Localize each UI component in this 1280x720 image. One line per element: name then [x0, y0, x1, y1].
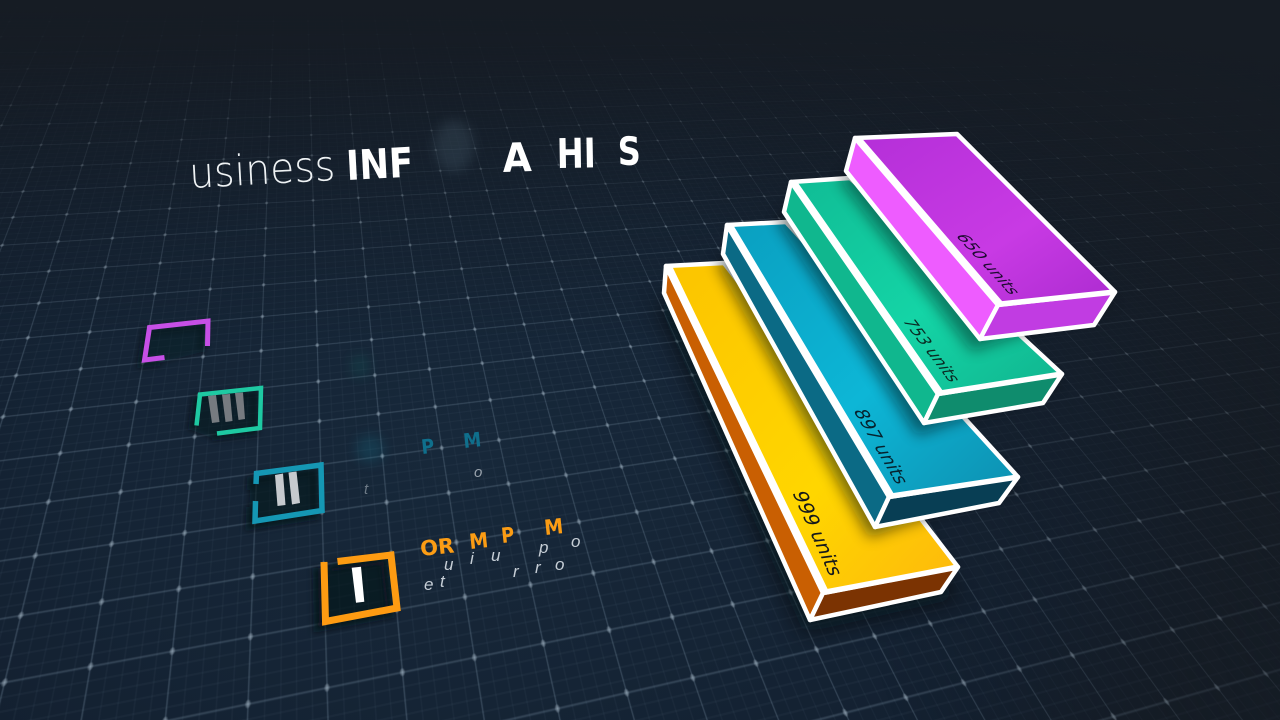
value label: 897 units: 897 units: [848, 408, 912, 485]
label: item I heading and text: M: [543, 514, 564, 540]
label: item I heading and text: OR: [419, 534, 455, 561]
label: item II heading and text (fading in): [356, 427, 482, 498]
title: Business Infographics (partially revealed): usiness: [188, 141, 336, 198]
value label: 999 units: 999 units: [787, 490, 848, 577]
label: item II heading and text (fading in): P: [420, 434, 435, 459]
label: item II heading and text (fading in): t: [364, 481, 369, 498]
label: item I heading and text: uiupo: [444, 532, 580, 574]
bar: green 753 units: [776, 178, 1062, 436]
title: Business Infographics (partially revealed): A: [502, 135, 532, 182]
label: item I heading and text: P: [500, 523, 515, 548]
label: item II heading and text (fading in): o: [474, 464, 482, 481]
icon: orange frame with numeral I: [317, 555, 397, 628]
label: item II heading and text (fading in): M: [462, 427, 482, 453]
icon: teal frame with numeral II: [249, 465, 322, 527]
label: item III heading smudge (fading in): [350, 354, 370, 378]
title: Business Infographics (partially revealed): [188, 120, 641, 198]
label: item I heading and text: M: [468, 528, 489, 554]
title: Business Infographics (partially revealed): INF: [345, 139, 414, 190]
label: item I heading and text: etrro: [424, 555, 564, 594]
icon: green frame with numeral III: [191, 388, 261, 438]
icon: magenta frame (IV): [140, 321, 208, 365]
bar: cyan 897 units: [716, 222, 1018, 538]
label: item I heading and text: [419, 514, 580, 594]
bar: purple 650 units: [839, 134, 1115, 352]
value label: 753 units: 753 units: [897, 318, 965, 383]
bar: yellow 999 units: [657, 263, 959, 633]
title: Business Infographics (partially revealed): S: [617, 130, 641, 175]
title: Business Infographics (partially revealed): HI: [556, 129, 596, 178]
value label: 650 units: 650 units: [950, 233, 1025, 295]
